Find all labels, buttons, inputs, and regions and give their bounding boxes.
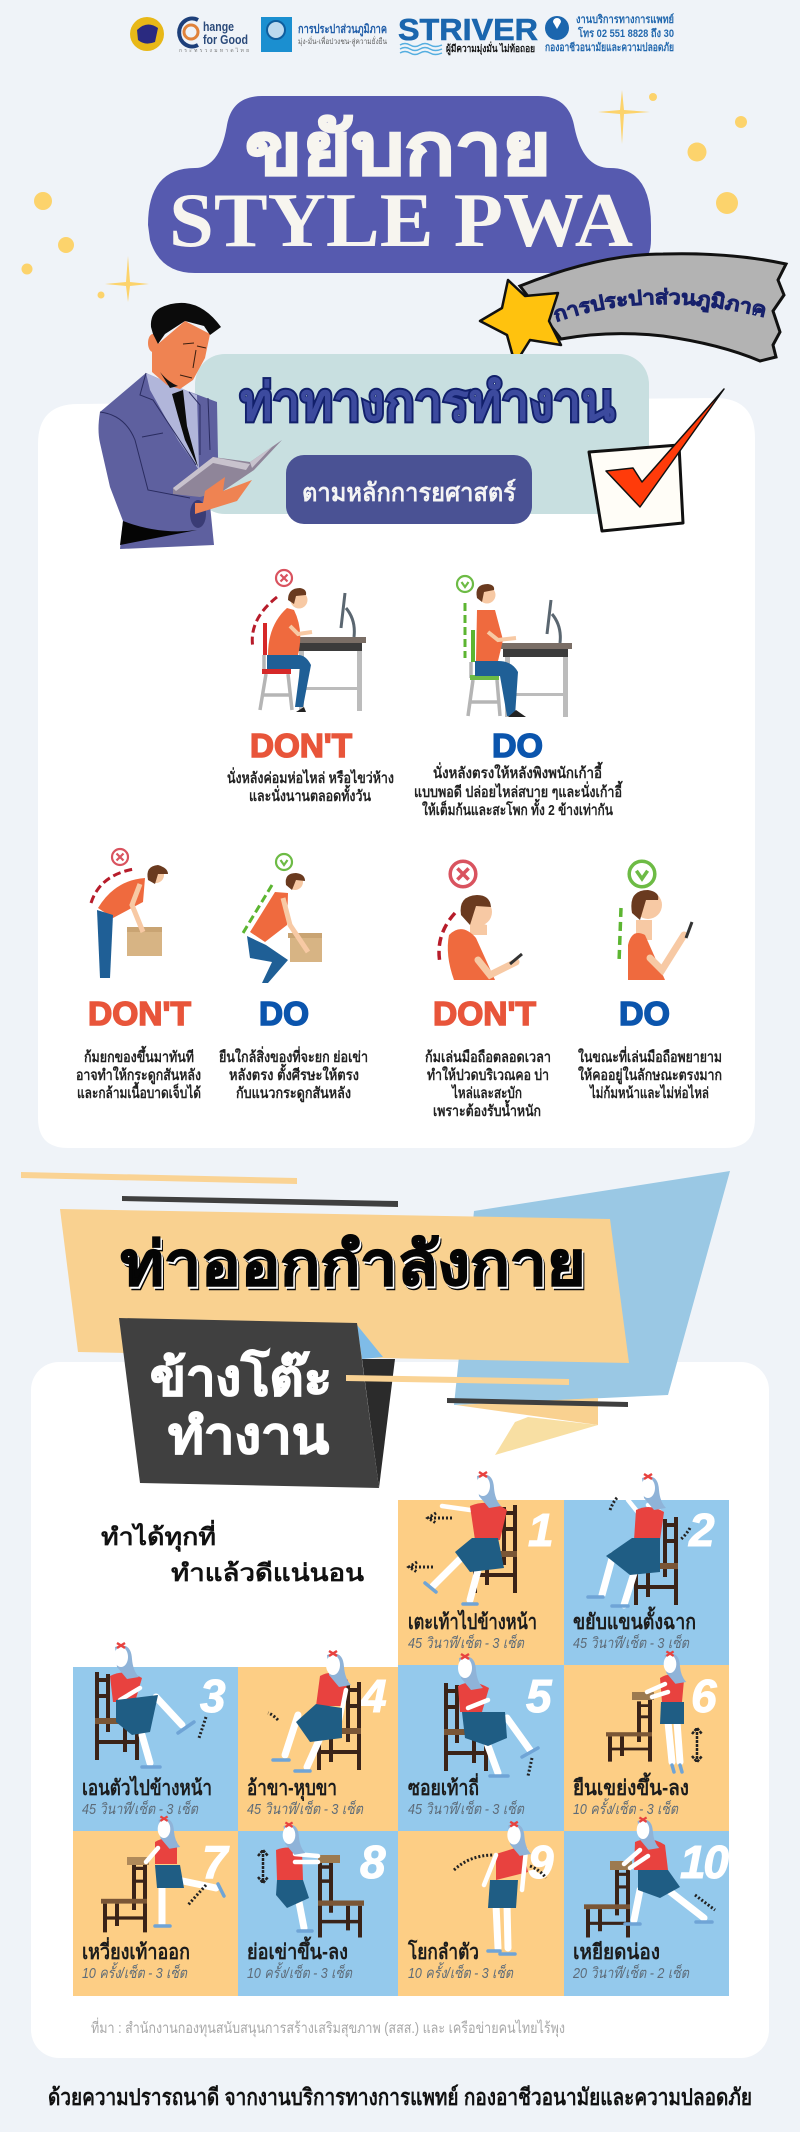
tagline: ทำแล้วดีแน่นอน: [171, 1560, 365, 1587]
text: do 1: แบบพอดี ปล่อยไหล่สบาย ๆและนั่งเก้าอี้: [414, 780, 623, 801]
logo row: [130, 12, 674, 56]
label: do 1: DO: [492, 727, 543, 764]
text: do 2: ยืนใกล้สิ่งของที่จะยก ย่อเข่า: [219, 1046, 368, 1066]
exercise 10: 20 วินาที/เซ็ต - 2 เซ็ต: [572, 1964, 690, 1982]
exercise 10: 10: [680, 1836, 729, 1888]
hand: [195, 477, 252, 514]
exercise 2: 45 วินาที/เซ็ต - 3 เซ็ต: [573, 1634, 690, 1652]
text: do 2: กับแนวกระดูกสันหลัง: [236, 1085, 351, 1103]
exercise 8: 10 ครั้ง/เซ็ต - 3 เซ็ต: [247, 1962, 353, 1982]
exercise 1: เตะเท้าไปข้างหน้า: [408, 1609, 537, 1634]
text: don't 2: อาจทำให้กระดูกสันหลัง: [76, 1066, 201, 1085]
exercise 5: [408, 1654, 553, 1818]
logo: change for good: hange: [203, 19, 234, 34]
exercise 5: ซอยเท้าถี่: [408, 1772, 479, 1800]
tagline: [101, 1519, 365, 1587]
exercise 4: [247, 1651, 387, 1818]
exercise 5: 5: [526, 1670, 553, 1722]
exercise 7: 10 ครั้ง/เซ็ต - 3 เซ็ต: [82, 1962, 188, 1982]
text: don't 2: ก้มยกของขึ้นมาทันที: [84, 1045, 194, 1066]
logo: provincial waterworks: [261, 17, 387, 52]
exercise 7: เหวี่ยงเท้าออก: [82, 1936, 190, 1964]
exercise 2: [573, 1474, 715, 1652]
title badge: [148, 96, 651, 273]
label: do 3: DO: [619, 995, 670, 1032]
exercise 9: 9: [528, 1836, 554, 1888]
icon: check mark on note: [589, 389, 724, 531]
exercise 10: [572, 1817, 729, 1982]
exercise 3: เอนตัวไปข้างหน้า: [82, 1775, 212, 1800]
illustration: phone don't: [439, 861, 522, 980]
exercise 6: [573, 1651, 717, 1818]
logo: provincial waterworks: มุ่ง-มั่น-เพื่อปวงชน-สู่ความยั่งยืน: [298, 35, 387, 47]
sleeve cuff: [190, 500, 206, 528]
text: do 3: ให้คออยู่ในลักษณะตรงมาก: [578, 1066, 722, 1085]
exercise 3: [82, 1643, 226, 1818]
illustration: man reading book: [98, 303, 282, 549]
logo: ministry emblem: [130, 17, 164, 51]
text: don't 3: [425, 1049, 551, 1120]
text: do 2: หลังตรง ตั้งศีรษะให้ตรง: [229, 1063, 359, 1084]
tagline: ทำได้ทุกที่: [101, 1519, 216, 1553]
text: don't 3: ก้มเล่นมือถือตลอดเวลา: [425, 1049, 551, 1066]
text: don't 3: ทำให้ปวดบริเวณคอ บ่า: [427, 1066, 549, 1084]
heading: exercises: ท่าออกกำลังกาย: [122, 1232, 587, 1300]
sparkles and dots: [22, 90, 747, 302]
exercise 1: 1: [528, 1504, 554, 1556]
icon: star: [480, 280, 561, 364]
heading: exercises: ท่าออกกำลังกาย: [123, 1234, 588, 1301]
subheading line 2: ทำงาน: [168, 1408, 329, 1464]
text: do 1: นั่งหลังตรงให้หลังพิงพนักเก้าอี้: [433, 761, 603, 782]
exercise 3: 3: [200, 1670, 226, 1722]
exercise 9: 10 ครั้ง/เซ็ต - 3 เซ็ต: [408, 1962, 514, 1982]
logo: medical services contact: งานบริการทางการแพทย์: [576, 13, 674, 26]
text: do 3: ไม่ก้มหน้าและไม่ห่อไหล่: [588, 1083, 709, 1102]
title line 1: ขยับกาย: [245, 110, 551, 190]
heading: working posture: ท่าทางการทำงาน: [240, 374, 615, 432]
exercise 7: 7: [202, 1836, 230, 1888]
exercise 4: 4: [360, 1670, 387, 1722]
exercise 9: โยกลำตัว: [407, 1939, 479, 1964]
exercise 3: 45 วินาที/เซ็ต - 3 เซ็ต: [82, 1800, 199, 1818]
text: don't 2: [76, 1045, 201, 1102]
section banner: exercises: [21, 1171, 730, 1488]
exercise 6: ยืนเขย่งขึ้น-ลง: [573, 1772, 689, 1800]
logo: STRIVER: ผู้มีความมุ่งมั่น ไม่ท้อถอย: [446, 41, 535, 56]
book: [173, 440, 282, 497]
exercise 8: ย่อเข่าขึ้น-ลง: [247, 1936, 348, 1964]
exercise 1: [408, 1472, 554, 1652]
exercise 8: [247, 1822, 386, 1982]
exercise 2: ขยับแขนตั้งฉาก: [573, 1606, 696, 1634]
exercise grid: [73, 1472, 729, 1996]
logo: medical services contact: [545, 13, 674, 54]
jacket: [98, 373, 218, 549]
ribbon and star: PWA: [478, 252, 788, 363]
neck and face: [152, 321, 210, 389]
label: do 2: DO: [259, 995, 309, 1032]
text: do 3: ในขณะที่เล่นมือถือพยายาม: [578, 1046, 722, 1066]
label: don't 2: DON'T: [88, 995, 191, 1032]
text: do 1: ให้เต็มก้นและสะโพก ทั้ง 2 ข้างเท่ากัน: [422, 798, 614, 819]
exercise 10: เหยียดน่อง: [573, 1940, 660, 1964]
subheading line 1: ข้างโต๊ะ: [150, 1348, 332, 1406]
exercise 4: 45 วินาที/เซ็ต - 3 เซ็ต: [247, 1800, 364, 1818]
label: don't 3: DON'T: [433, 995, 536, 1032]
exercise 6: 6: [691, 1670, 717, 1722]
text: don't 3: ไหล่และสะบัก: [450, 1083, 522, 1102]
text: don't 3: เพราะต้องรับน้ำหนัก: [433, 1099, 541, 1120]
text: don't 2: และกล้ามเนื้อบาดเจ็บได้: [77, 1081, 201, 1102]
logo: change for good: [179, 18, 249, 54]
text: do 1: [414, 761, 623, 819]
logo: medical services contact: โทร 02 551 8828 ถึง 30: [577, 26, 674, 40]
title line 2: STYLE PWA: [169, 177, 633, 263]
ribbon label: การประปาส่วนภูมิภาค: [554, 288, 766, 322]
subheading pill: [286, 455, 532, 524]
label: don't 1: DON'T: [250, 727, 352, 764]
tile backgrounds: [73, 1500, 729, 1996]
exercise 2: 2: [688, 1504, 715, 1556]
text: don't 1: และนั่งนานตลอดทั้งวัน: [249, 784, 372, 805]
exercise 7: [82, 1816, 230, 1982]
white panel: desk exercises: [31, 1362, 769, 2058]
illustration: phone do: [619, 861, 692, 980]
exercise 4: อ้าขา-หุบขา: [247, 1776, 337, 1802]
exercise 1: 45 วินาที/เซ็ต - 3 เซ็ต: [408, 1634, 525, 1652]
text: don't 1: นั่งหลังค่อมห่อไหล่ หรือไขว่ห้าง: [227, 767, 394, 787]
text: don't 1: [227, 767, 394, 805]
logo: change for good: for Good: [203, 32, 248, 47]
logo: STRIVER: STRIVER: [398, 12, 538, 47]
illustration: sitting do: [457, 576, 572, 717]
exercise 6: 10 ครั้ง/เซ็ต - 3 เซ็ต: [573, 1798, 679, 1818]
text: do 3: [578, 1046, 722, 1102]
logo: medical services contact: กองอาชีวอนามัยและความปลอดภัย: [545, 41, 674, 54]
text: do 2: [219, 1046, 368, 1103]
illustration: sitting don't: [252, 570, 366, 712]
teal heading panel: [195, 354, 649, 514]
heading: exercises: ท่าออกกำลังกาย: [120, 1230, 586, 1298]
logo: provincial waterworks: การประปาส่วนภูมิภาค: [298, 22, 387, 37]
logo: change for good: กระทรวงมหาดไทย: [179, 47, 249, 54]
exercise 5: 45 วินาที/เซ็ต - 3 เซ็ต: [408, 1800, 525, 1818]
exercise 9: [407, 1822, 554, 1982]
illustration: lifting do: [243, 854, 322, 983]
illustration: lifting don't: [91, 849, 168, 978]
exercise 8: 8: [360, 1836, 386, 1888]
source note: ที่มา : สำนักงานกองทุนสนับสนุนการสร้างเสริมสุขภาพ (สสส.) และ เครือข่ายคนไทยไร้พุง: [91, 2017, 565, 2038]
subheading pill: ตามหลักการยศาสตร์: [302, 478, 517, 507]
white panel: working posture: [38, 398, 755, 1148]
